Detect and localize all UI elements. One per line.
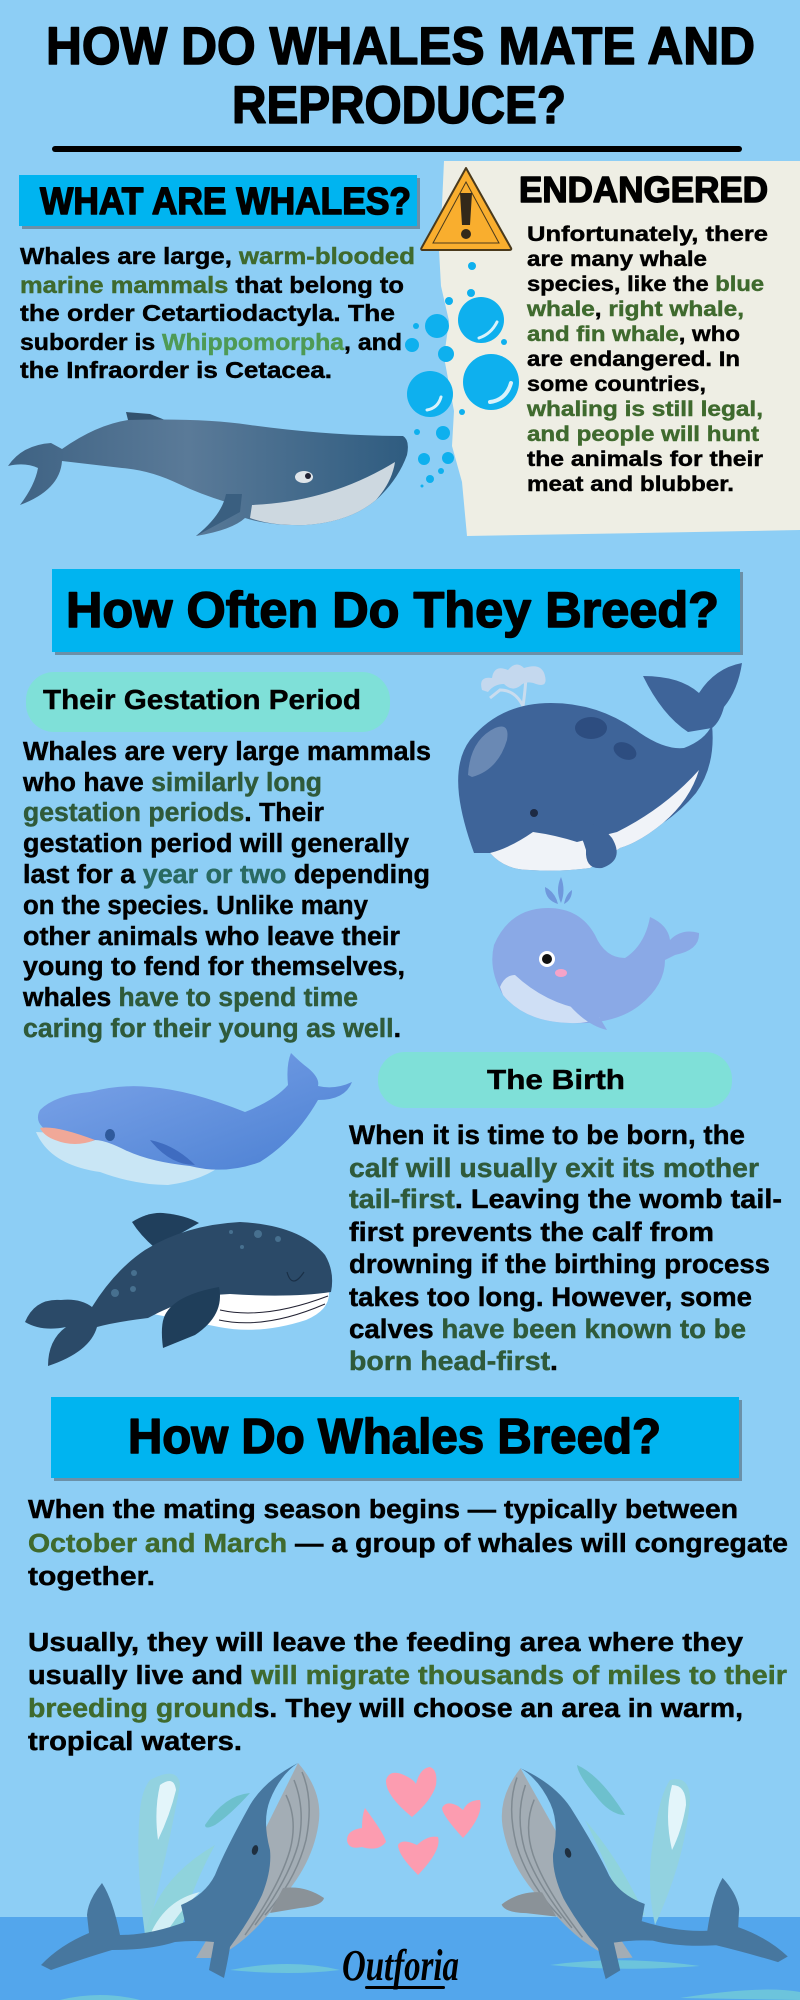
breeding text: tropical waters. (28, 1728, 242, 1756)
gestation text: whales have to spend time (22, 984, 358, 1012)
breeding text: together. (28, 1563, 155, 1591)
gestation text: caring for their young as well . (23, 1015, 401, 1043)
gestation text: last for a year or two depending (23, 861, 430, 889)
endangered text: whaling is still legal, (526, 398, 763, 421)
panel: gestation label (26, 672, 390, 732)
what are whales text: marine mammals that belong to (20, 272, 404, 298)
endangered text: meat and blubber. (527, 473, 734, 496)
birth text: tail-first . Leaving the womb tail- (349, 1184, 782, 1214)
birth text (349, 1120, 782, 1376)
breeding text: When the mating season begins — typically between (28, 1496, 738, 1524)
heading: what are whales: WHAT ARE WHALES? (40, 181, 411, 223)
breeding text (28, 1496, 788, 1756)
heading: how often do they breed: How Often Do They Breed? (66, 582, 719, 638)
what are whales text: suborder is Whippomorpha , and (20, 329, 402, 355)
birth text: When it is time to be born, the (349, 1120, 745, 1150)
endangered text: are many whale (527, 248, 707, 271)
gestation text: young to fend for themselves, (23, 953, 405, 981)
birth text: drowning if the birthing process (349, 1249, 770, 1279)
gestation text: gestation periods . Their (23, 799, 324, 827)
water (0, 1917, 800, 2000)
icon: big cartoon whale (458, 663, 742, 871)
panel: birth label (378, 1052, 732, 1108)
icon: warning triangle (421, 168, 511, 250)
birth text: calves have been known to be (349, 1314, 746, 1344)
birth text: first prevents the calf from (349, 1217, 714, 1247)
gestation text: gestation period will generally (23, 830, 410, 858)
icon: left water splash (138, 1774, 250, 1935)
breeding text: breeding ground s. They will choose an area in warm, (28, 1695, 743, 1723)
icon: bubbles (405, 262, 519, 488)
icon: grey-blue whale (8, 412, 408, 536)
icon: right breaching whale (495, 1755, 788, 1984)
icon: small periwinkle whale (492, 877, 699, 1030)
what are whales text: the Infraorder is Cetacea. (20, 357, 332, 383)
icon: right water splash (577, 1765, 690, 1925)
endangered heading: ENDANGERED (519, 169, 768, 210)
panel: birth label: The Birth (487, 1064, 625, 1095)
birth text: takes too long. However, some (349, 1282, 752, 1312)
gestation text: other animals who leave their (23, 923, 400, 951)
gestation text: Whales are very large mammals (23, 738, 431, 766)
what are whales text: Whales are large, warm-blooded (20, 243, 415, 269)
heading: how do whales breed (51, 1397, 742, 1481)
breeding text: Usually, they will leave the feeding area where they (28, 1629, 744, 1657)
what are whales text: the order Cetartiodactyla. The (20, 300, 395, 326)
endangered text: are endangered. In (527, 348, 740, 371)
endangered text: species, like the blue (527, 273, 764, 296)
breeding text: usually live and will migrate thousands of miles to their (28, 1662, 787, 1690)
gestation text (22, 738, 431, 1043)
endangered text: Unfortunately, there (527, 223, 768, 246)
title: REPRODUCE? (232, 76, 566, 135)
endangered text: and fin whale , who (527, 323, 740, 346)
icon: hearts (347, 1767, 481, 1875)
heading: how often do they breed (52, 569, 743, 655)
icon: left breaching whale (41, 1763, 324, 1978)
breeding text: October and March — a group of whales will congregate (28, 1530, 788, 1558)
endangered text: some countries, (527, 373, 706, 396)
panel: gestation label: Their Gestation Period (43, 684, 361, 715)
what are whales text (20, 243, 415, 383)
title (46, 17, 755, 135)
icon: blue whale with open mouth (36, 1053, 352, 1185)
birth text: born head-first . (349, 1346, 558, 1376)
endangered text (526, 223, 768, 496)
birth text: calf will usually exit its mother (349, 1153, 759, 1183)
heading: how do whales breed: How Do Whales Breed? (128, 1410, 661, 1464)
panel: endangered paper (439, 161, 800, 536)
endangered text: whale , right whale, (526, 298, 744, 321)
logo: Outforia: Outforia (342, 1941, 459, 1990)
endangered text: the animals for their (527, 448, 763, 471)
gestation text: who have similarly long (22, 769, 322, 797)
endangered text: and people will hunt (527, 423, 759, 446)
gestation text: on the species. Unlike many (23, 892, 369, 920)
icon: dark whale (25, 1213, 332, 1366)
title: HOW DO WHALES MATE AND (46, 17, 755, 76)
